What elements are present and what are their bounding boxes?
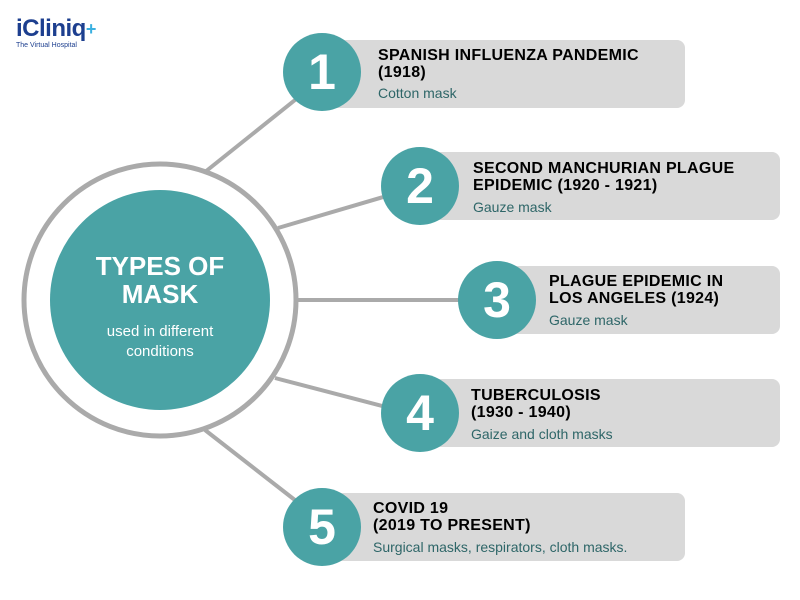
central circle: TYPES OF <box>96 251 224 281</box>
item 3 <box>458 261 780 339</box>
text: 2 <box>406 158 434 214</box>
item 5 <box>283 488 685 566</box>
text: 3 <box>483 272 511 328</box>
item 2 <box>381 147 780 225</box>
text: Cotton mask <box>378 85 457 101</box>
text: LOS ANGELES (1924) <box>549 290 719 307</box>
central circle: used in different <box>107 323 213 340</box>
item 4 <box>381 374 780 452</box>
text: 5 <box>308 499 336 555</box>
text: Surgical masks, respirators, cloth masks. <box>373 539 627 555</box>
logo: iCliniq+ <box>16 15 96 42</box>
text: 1 <box>308 44 336 100</box>
item 1 <box>283 33 685 111</box>
text: (2019 TO PRESENT) <box>373 517 531 534</box>
text: TUBERCULOSIS <box>471 387 601 404</box>
text: Gauze mask <box>473 199 552 215</box>
text: Gaize and cloth masks <box>471 426 613 442</box>
text: SECOND MANCHURIAN PLAGUE <box>473 160 734 177</box>
logo: The Virtual Hospital <box>16 42 77 49</box>
central circle <box>50 190 270 410</box>
text: (1930 - 1940) <box>471 404 571 421</box>
text: SPANISH INFLUENZA PANDEMIC <box>378 47 639 64</box>
text: EPIDEMIC (1920 - 1921) <box>473 177 657 194</box>
text: PLAGUE EPIDEMIC IN <box>549 273 723 290</box>
text: (1918) <box>378 64 426 81</box>
text: Gauze mask <box>549 312 628 328</box>
text: 4 <box>406 385 434 441</box>
text: COVID 19 <box>373 500 448 517</box>
central circle: conditions <box>126 343 194 360</box>
central circle: MASK <box>122 279 198 309</box>
